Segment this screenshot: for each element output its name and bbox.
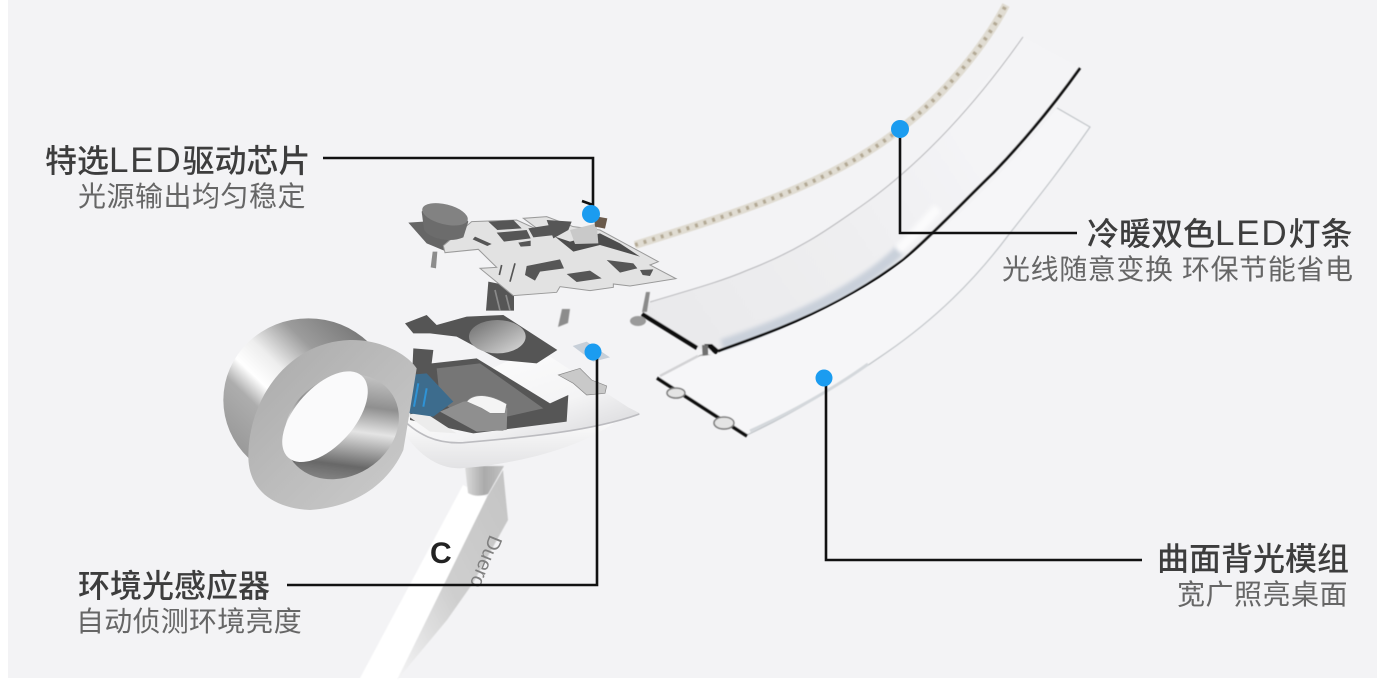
fan plate [405, 315, 557, 363]
leader line [900, 129, 1077, 233]
clip [558, 368, 607, 395]
callout: driver chip [45, 141, 600, 223]
callout: LED strip [891, 120, 1354, 285]
dome [467, 396, 507, 413]
marker dot [891, 120, 909, 138]
marker dot [816, 370, 832, 386]
leader line [323, 158, 593, 205]
marker dot [582, 205, 600, 223]
callout: ambient light sensor [76, 344, 602, 637]
heading: 环境光感应器 [78, 568, 270, 604]
marker dot [584, 344, 602, 360]
description: 光线随意变换 环保节能省电 [1002, 254, 1354, 285]
ring inner wall [265, 353, 419, 500]
leader line [826, 378, 1142, 560]
circuit board [408, 199, 676, 311]
lamp arm icon: C [430, 537, 452, 570]
lower white pieces [407, 412, 457, 433]
heading: 冷暖双色LED灯条 [1087, 214, 1353, 253]
callout: curved backlight module [816, 370, 1349, 610]
leader line [287, 352, 597, 585]
description: 自动侦测环境亮度 [76, 606, 302, 637]
housing floor [437, 363, 543, 431]
lamp tray underside [395, 413, 640, 468]
upper curved panel [630, 37, 1080, 366]
lamp arm logo: Duero [465, 532, 506, 591]
heading: 曲面背光模组 [1157, 541, 1349, 577]
rim [398, 414, 639, 443]
lamp head with ring and sensor housing [223, 315, 640, 510]
LED light strip [635, 5, 1006, 245]
heading: 特选LED驱动芯片 [45, 141, 311, 180]
lamp arm body [359, 466, 508, 680]
housing [410, 348, 568, 433]
ring side [223, 318, 393, 482]
description: 宽广照亮桌面 [1177, 579, 1348, 610]
wires [402, 373, 453, 417]
description: 光源输出均匀稳定 [78, 181, 306, 212]
housing beam [440, 398, 507, 432]
fan [469, 320, 526, 353]
lower curved panel [657, 108, 1090, 436]
sensor [573, 342, 610, 362]
small screw [558, 309, 570, 327]
ring face [248, 340, 417, 510]
ring opening [266, 356, 384, 477]
lamp tray top surface [398, 357, 640, 442]
